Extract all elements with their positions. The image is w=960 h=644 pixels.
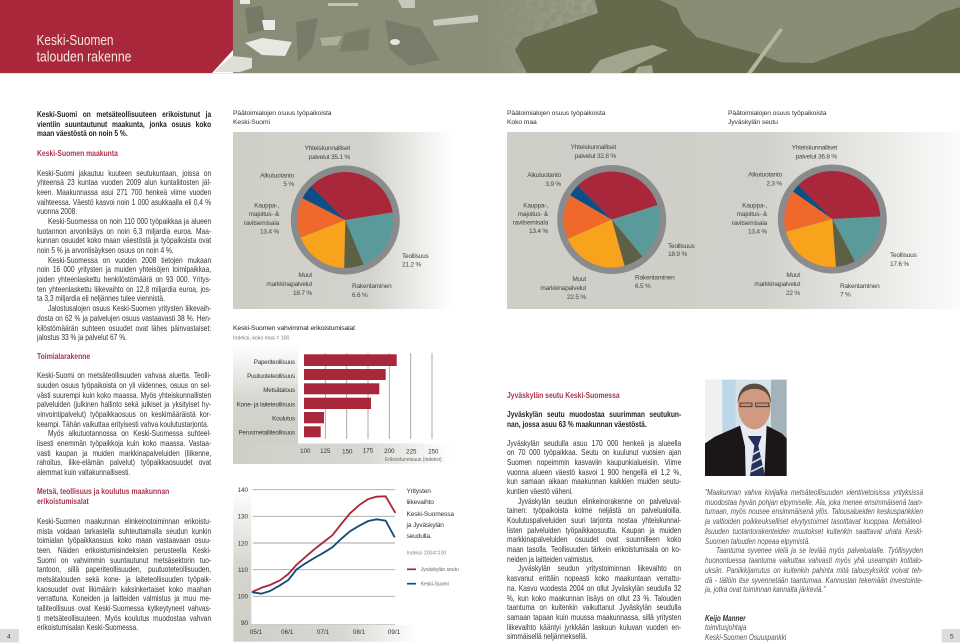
body text: maakunta: dosta on 62 % ja palvelujen osuus vastaavasti 38 %. Hen- <box>37 314 211 323</box>
page number box left: 4 <box>7 634 11 640</box>
bar chart: erikoistumisalat: 150 <box>342 448 353 455</box>
pie labels: Koko maa: markkinapalvelut <box>540 285 586 292</box>
chart title: Keski-Suomi: Keski-Suomi <box>233 119 270 126</box>
line chart caption and legend: Keski-Suomi <box>421 581 449 587</box>
bar chart title: Keski-Suomen vahvimmat erikoistumisalat <box>233 325 355 332</box>
pie chart: Koko maa <box>557 165 666 274</box>
quote text: uksiin. Paniikkijarrutus on kuitenkin pahinta mitä talousyksiköt voivat teh- <box>705 566 923 575</box>
heading: Keski-Suomen maakunta: Keski-Suomen maakunta <box>37 149 118 158</box>
body text: maakunta: ten yhteenlaskettu liikevaihto on 12,8 miljardia euroa, jos- <box>37 285 211 294</box>
pie labels: Koko maa: 6.5 % <box>635 283 651 290</box>
bar chart: erikoistumisalat: 225 <box>406 448 417 455</box>
panel background: Koko maa and Jyväskylän seutu <box>507 132 960 309</box>
heading: Metsä, teollisuus ja koulutus <box>37 487 169 506</box>
quote text: ja, jotka ovat toiminnan kannalta järkeviä.” <box>705 585 825 594</box>
body text: maakunta: Keski-Suomessa on vuoden 2008 tietojen mukaan <box>48 256 211 265</box>
quote attribution <box>705 614 786 642</box>
body text: maakunta: Jalostusalojen osuus Keski-Suomen yritysten liikevaih- <box>48 304 211 313</box>
bar chart: erikoistumisalat: Erikoistuneisuus (indeksi) <box>385 457 442 463</box>
pie labels: Keski-Suomi: Alkutuotanto <box>260 172 295 180</box>
portrait photo <box>705 380 787 476</box>
pie labels: Keski-Suomi: palvelut 35.1 % <box>309 154 350 161</box>
header aerial photo <box>214 0 960 73</box>
line chart caption and legend: ja Jyväskylän <box>406 522 444 529</box>
title: Keski-Suomen <box>36 33 114 49</box>
body text: Jyväskylän seutu: simmäisellä neljänneksellä. <box>507 632 587 641</box>
pie labels: Keski-Suomi <box>244 145 429 299</box>
pie labels: Koko maa: Alkutuotanto <box>527 172 562 179</box>
heading: Toimialarakenne: Toimialarakenne <box>37 352 90 361</box>
pie labels: Jyväskylän seutu: 2.3 % <box>766 180 782 188</box>
body text: toimialarakenne: palveluiden (julkinen hallinto sekä julkiset ja yksityiset hy- <box>37 400 211 409</box>
body text: maakunta: vaihteessa. Väestö kasvoi noin 1 000 asukkaalla eli 0,4 % <box>37 198 211 207</box>
line chart caption and legend: Jyväskylän seutu <box>421 567 459 573</box>
line chart caption and legend: Yritysten <box>406 488 431 495</box>
body text: Jyväskylän seutu: taantuma on kuitenkin vaikuttanut Jyväskylän seudulla <box>507 603 681 612</box>
quote text: ”Maakunnan vahva kivijalka metsäteollisuuden vientivetoisissa yrityksissä <box>705 488 923 497</box>
chart title: Jyväskylän seutu: Päätoimialojen osuus työpaikoista <box>728 110 827 117</box>
body text: toimialarakenne: keampi. Tähän vaikuttaa erityisesti vahva koulutustarjonta. <box>37 420 209 429</box>
body text: Jyväskylän seutu: neiden ja laitteiden valmistus. <box>507 555 594 564</box>
body text: maakunta: jalostus 33 % ja palvelut 67 %. <box>37 333 127 342</box>
body text: erikoistumisalat: metsätalouden sekä kone- ja laiteteollisuuden työpaik- <box>37 575 211 584</box>
pie labels: Jyväskylän seutu: Rakentaminen <box>840 283 880 290</box>
body text: maakunta <box>36 168 212 342</box>
pie labels: Jyväskylän seutu: Alkutuotanto <box>748 172 783 178</box>
body text: Jyväskylän seutu: Koulutuspalveluiden suuri tarjonta nostaa yhteiskunnal- <box>507 516 681 525</box>
pie labels: Keski-Suomi: 6.6 % <box>352 292 368 299</box>
pie labels: Koko maa: 13.4 % <box>529 228 548 235</box>
bar chart: erikoistumisalat: 200 <box>384 448 395 455</box>
body text: maakunta: noin 16 000 yritysten ja muiden yhteisöjen toimipaikkaa, <box>37 265 211 274</box>
body text: Jyväskylän seutu: %, kun koko maakunnan lisäys on ollut 23 %. Talouden <box>507 594 681 602</box>
chart title: Jyväskylän seutu: Jyväskylän seutu <box>728 119 778 126</box>
lead text: Jyväskylän seutu: Jyväskylän seutu muodostaa suurimman seutukun- <box>507 410 681 419</box>
heading: Metsä, teollisuus ja koulutus: erikoistumisalat <box>37 497 89 506</box>
red title panel <box>0 0 233 73</box>
quote text: Taantuma syvenee vielä ja se leviää myös palvelualalle. Työllisyyden <box>716 546 923 555</box>
body text: Jyväskylän seutu: liikevaihto kääntyi jyrkkään laskuun kuluvan vuoden en- <box>507 623 681 632</box>
pie labels: Koko maa: Kauppa-, <box>523 202 548 210</box>
body text: Jyväskylän seutu: samaan tapaan kuin muussa maakunnassa, sillä yritysten <box>507 613 681 622</box>
intro text <box>37 110 212 138</box>
line chart: yritysten liikevaihto: 110 <box>238 567 248 574</box>
body text: erikoistumisalat: teen. Näiden erikoistumisindeksien perusteella Keski- <box>37 546 211 555</box>
body text: Jyväskylän seutu: listen palveluiden työpaikkaosuutta. Kaupan ja muiden <box>507 526 681 535</box>
pie labels: Keski-Suomi: Kauppa-, <box>254 202 279 210</box>
pie labels: Jyväskylän seutu: Muut <box>786 272 800 279</box>
quote text: muodostaa hyvän pohjan elpymiselle. Ala, joka menee ensimmäisenä taan- <box>705 498 923 507</box>
bar chart: erikoistumisalat: Paperiteollisuus <box>254 359 295 366</box>
bar chart: erikoistumisalat: Metsätalous <box>263 387 295 394</box>
pie labels: Koko maa: ravitsemisala <box>513 220 549 226</box>
heading: Jyväskylän seutu: Jyväskylän seutu Keski-Suomessa <box>507 391 620 400</box>
pie labels: Keski-Suomi: Muut <box>298 272 312 279</box>
body text: Jyväskylän seutu: Jyväskylän seudulla asuu 170 000 henkeä ja alueella <box>507 438 681 448</box>
pie labels: Keski-Suomi: Yhteiskunnalliset <box>305 145 350 152</box>
body text: toimialarakenne: suuden osuus työpaikoista on yli viidennes, osuus on sel- <box>37 381 211 390</box>
line chart caption and legend: Indeksi 2004=100 <box>407 551 447 557</box>
pie labels: Koko maa <box>513 144 695 301</box>
line chart: yritysten liikevaihto: 07/1 <box>317 629 330 636</box>
pie labels: Jyväskylän seutu: Teollisuus <box>890 252 917 259</box>
line chart: yritysten liikevaihto: 140 <box>237 487 248 494</box>
pie labels: Keski-Suomi: Teollisuus <box>402 253 429 260</box>
line chart: yritysten liikevaihto <box>233 487 417 642</box>
bar chart: erikoistumisalat <box>233 345 451 464</box>
line chart: yritysten liikevaihto: 06/1 <box>281 629 294 636</box>
pie labels: Koko maa: majoitus- & <box>518 211 549 218</box>
pie labels: Keski-Suomi: ravitsemisala <box>244 220 280 227</box>
white strip under header <box>0 73 960 74</box>
body text: maakunta: yhteensä 23 kuntaa vuoden 2009 alun kuntaliitosten jäl- <box>37 178 211 187</box>
body text: maakunta: tuotannon arvonlisäys on noin 6,3 miljardia euroa. Maa- <box>37 227 211 236</box>
pie labels: Jyväskylän seutu: 17.6 % <box>890 261 909 268</box>
chart title: Koko maa: Koko maa <box>507 119 537 126</box>
title: talouden rakenne <box>36 50 132 66</box>
page number box right <box>942 629 960 642</box>
body text: erikoistumisalat: tantoon, sillä paperiteollisuuden, puutuoteteollisuuden, <box>37 565 211 574</box>
pie labels: Jyväskylän seutu: 7 % <box>840 292 851 298</box>
pie labels: Koko maa: Muut <box>572 276 586 283</box>
body text: Jyväskylän seutu: maan tasolla. Teollisuuden tärkein erikoistumisala on ko- <box>507 545 681 554</box>
quote text <box>704 488 923 594</box>
body text: Jyväskylän seutu: markkinapalveluiden osuudet ovat suunnilleen koko <box>507 535 681 544</box>
pie labels: Keski-Suomi: 13.4 % <box>260 228 279 236</box>
body text: maakunta: vuonna 2008. <box>37 207 77 216</box>
quote text: huonontuessa taantuma vaikuttaa vahvasti myös yhä useampiin kotitalo- <box>705 556 923 565</box>
pie labels: Keski-Suomi: 21.2 % <box>402 262 421 268</box>
pie labels: Jyväskylän seutu: Yhteiskunnalliset <box>792 144 837 152</box>
pie labels: Jyväskylän seutu <box>732 144 917 298</box>
line chart caption and legend: seudulla. <box>406 533 432 540</box>
line chart: yritysten liikevaihto: 100 <box>237 594 248 601</box>
pie labels: Koko maa: palvelut 32.8 % <box>575 153 616 160</box>
quote attribution: toimitusjohtaja <box>705 623 746 632</box>
body text: erikoistumisalat: erikoistumisalan Keski-Suomessa. <box>37 623 138 632</box>
bar chart title: Indeksi, koko maa = 100 <box>233 336 289 342</box>
pie labels: Jyväskylän seutu: majoitus- & <box>737 211 768 218</box>
pie labels: Keski-Suomi: 18.7 % <box>293 290 312 297</box>
body text: toimialarakenne: Keski-Suomi on metsäteollisuuden vahvaa aluetta. Teolli- <box>37 371 211 380</box>
pie labels: Keski-Suomi: markkinapalvelut <box>266 281 312 288</box>
pie labels: Jyväskylän seutu: Kauppa-, <box>742 202 767 210</box>
body text: toimialarakenne: västi suurempi kuin koko maassa. Myös yhteiskunnallisten <box>37 391 211 400</box>
line chart caption and legend <box>406 488 459 587</box>
body text: maakunta: kunnan osuudet koko maan väestöstä ja työpaikoista ovat <box>37 236 211 245</box>
pie labels: Jyväskylän seutu: 13.4 % <box>748 228 767 236</box>
body text: Jyväskylän seutu: Jyväskylän seudun yritystoiminnan liikevaihto on <box>518 564 681 573</box>
chart title: Koko maa: Päätoimialojen osuus työpaikoista <box>507 110 606 117</box>
body text: maakunta: Keski-Suomi jakautuu kuuteen seutukuntaan, joissa on <box>37 168 211 178</box>
pie chart: Keski-Suomi <box>291 166 400 274</box>
body text: toimialarakenne <box>37 371 212 477</box>
chart title: Keski-Suomi <box>233 110 332 126</box>
panel background: Keski-Suomi <box>233 132 453 309</box>
pie labels: Keski-Suomi: majoitus- & <box>249 211 280 218</box>
quote text: Suomen talouden nopeaa elpymistä. <box>705 537 810 546</box>
bar chart: erikoistumisalat: Koulutus <box>272 416 295 422</box>
bar chart: erikoistumisalat: 125 <box>320 448 331 455</box>
page number box left <box>0 629 19 642</box>
body text: erikoistumisalat: mista voidaan tarkastella suhteuttamalla seudun kunkin <box>37 527 211 536</box>
body text: erikoistumisalat: Suomi on vahvimmin suuntautunut metsäsektorin tuo- <box>37 556 211 565</box>
pie labels: Koko maa: Yhteiskunnalliset <box>571 144 616 151</box>
body text: maakunta: Keski-Suomessa on noin 110 000 työpaikkaa ja alueen <box>48 217 211 226</box>
intro text: vientiin suuntautunut maakunta, jonka osuus koko <box>37 120 211 129</box>
bar chart: erikoistumisalat: Kone- ja laiteteollisuus <box>237 402 295 408</box>
body text: Jyväskylän seutu: kasvanut erittäin nopeasti koko maakuntaan verrattu- <box>507 574 681 583</box>
bar chart title <box>233 325 355 342</box>
line chart: yritysten liikevaihto: 08/1 <box>353 629 366 636</box>
body text: erikoistumisalat: talliteollisuus ovat Keski-Suomessa kytkeytyneet vahvas- <box>37 604 211 613</box>
quote attribution: Keijo Manner <box>705 614 746 622</box>
lead text: Jyväskylän seutu <box>507 410 681 429</box>
pie labels: Koko maa: 3.9 % <box>545 181 561 188</box>
body text: toimialarakenne: vinvointipalvelut) työpaikkaosuus on keskimääräistä kor- <box>37 410 211 419</box>
body text: maakunta: joiden yhteenlaskettu henkilöstömäärä on 93 000. Yritys- <box>37 275 211 284</box>
body text: Jyväskylän seutu: na. Kasvu vuodesta 2004 on ollut Jyväskylän seudulla 32 <box>507 584 681 593</box>
bar chart: erikoistumisalat: Puutuoteteollisuus <box>247 373 295 380</box>
line chart: yritysten liikevaihto: 09/1 <box>388 629 401 636</box>
pie labels: Jyväskylän seutu: ravitsemisala <box>732 220 768 227</box>
lead text: Jyväskylän seutu: nan, jossa asuu 63 % maakunnan väestöstä. <box>507 420 647 429</box>
body text: toimialarakenne: Myös alkutuotannossa on Keski-Suomessa suhteel- <box>48 429 211 438</box>
bar chart: erikoistumisalat: 175 <box>363 448 374 455</box>
bar chart: erikoistumisalat: Perusmetalliteollisuus <box>238 430 295 436</box>
body text: toimialarakenne: rahoitus, liike-elämän palvelut) työpaikkaosuudet ovat <box>37 458 211 467</box>
intro text: Keski-Suomi on metsäteollisuuteen erikoistunut ja <box>37 110 211 119</box>
body text: maakunta: keen. Maakunnassa asui 271 700 henkeä viime vuoden <box>37 188 211 197</box>
pie labels: Jyväskylän seutu: 22 % <box>786 290 800 297</box>
page number box right: 5 <box>950 634 954 640</box>
bar chart: erikoistumisalat: 100 <box>300 448 311 455</box>
heading: Metsä, teollisuus ja koulutus: Metsä, teollisuus ja koulutus maakunnan <box>37 487 169 496</box>
chart title: Koko maa <box>507 110 606 126</box>
body text: maakunta: noin 5 % ja arvonlisäyksen osuus on noin 4 %. <box>37 246 174 255</box>
body text: erikoistumisalat: ti metsäteollisuuteen. Myös koulutus muodostaa vahvan <box>37 614 211 623</box>
pie labels: Jyväskylän seutu: markkinapalvelut <box>754 281 800 288</box>
body text: Jyväskylän seutu: Suomen nopeimmin kasvaviin kaupunkialueisiin. Viime <box>507 458 681 467</box>
body text: Jyväskylän seutu: kuntien väestö väheni. <box>507 487 573 496</box>
chart title: Jyväskylän seutu <box>728 110 827 126</box>
body text: maakunta: ta 3,3 miljardia eli neljännes tulee viennistä. <box>37 294 165 303</box>
title <box>36 33 132 66</box>
pie labels: Koko maa: Teollisuus <box>668 243 695 250</box>
body text: erikoistumisalat: verrattuna. Koneiden ja laitteiden valmistus ja muu me- <box>37 594 211 603</box>
body text: Jyväskylän seutu: tainen: työpaikoista kolme neljästä on palvelualoilla. <box>507 506 681 515</box>
pie labels: Koko maa: 18.9 % <box>668 251 687 258</box>
pie labels: Jyväskylän seutu: palvelut 36.8 % <box>796 154 837 160</box>
pie labels: Keski-Suomi: Rakentaminen <box>352 283 392 290</box>
quote text: ja valtioiden poikkeukselliset elvytystoimet tasoittavat kuoppaa. Metsäteol- <box>705 517 923 526</box>
body text: Jyväskylän seutu <box>507 438 682 641</box>
body text: toimialarakenne: vasti kaupan ja muiden markkinapalveluiden (liikenne, <box>37 449 211 458</box>
line chart: yritysten liikevaihto: 130 <box>237 514 248 521</box>
quote text: lisuuden tuotantorakenteiden muutokset kuitenkin saattavat uhata Keski- <box>705 527 923 536</box>
body text: toimialarakenne: lisesti enemmän työpaikkoja kuin koko maassa. Vastaa- <box>37 439 211 448</box>
quote attribution: Keski-Suomen Osuuspankki <box>705 633 786 642</box>
body text: erikoistumisalat: kaosuudet ovat likimäärin kaksinkertaiset koko maahan <box>37 585 211 594</box>
line chart caption and legend: liikevaihto <box>406 499 434 506</box>
chart title: Keski-Suomi: Päätoimialojen osuus työpaikoista <box>233 110 332 117</box>
quote text: dä - tällöin itse syvennetään taantumaa. Kannustan tekemään investointe- <box>705 576 923 585</box>
pie chart: Jyväskylän seutu <box>778 164 887 274</box>
line chart: yritysten liikevaihto: 90 <box>241 620 248 627</box>
line chart: yritysten liikevaihto: 120 <box>237 540 248 547</box>
pie labels: Koko maa: Rakentaminen <box>635 274 675 282</box>
body text: Jyväskylän seutu: vuonna alueen väestö kasvoi 1 900 hengellä eli 1,2 %, <box>507 468 681 477</box>
body text: Jyväskylän seutu: kun samaan aikaan maakunnan kaikkien muiden seutu- <box>507 477 681 486</box>
body text: erikoistumisalat <box>37 517 211 632</box>
line chart caption and legend: Keski-Suomessa <box>406 511 454 518</box>
intro text: maan väestöstä on noin 5 %. <box>37 129 128 138</box>
bar chart: erikoistumisalat: 250 <box>428 449 439 456</box>
quote text: tumaan, myös nousee ensimmäisenä ylös. Talousalueiden keskuspankkien <box>705 507 923 516</box>
body text: toimialarakenne: alemmat kuin valtakunnallisesti. <box>37 468 130 477</box>
pie labels: Koko maa: 22.5 % <box>567 294 586 301</box>
body text: Jyväskylän seutu: on 70 000 työpaikkaa. Seutu on kuulunut vuosien ajan <box>507 448 681 457</box>
body text: erikoistumisalat: toimialan työpaikkaosuus koko maan vastaavaan osuu- <box>37 536 211 545</box>
body text: maakunta: kilöstömäärän suhteen osuudet ovat lähes päinvastaiset: <box>37 324 211 332</box>
pie labels: Keski-Suomi: 5 % <box>283 181 294 188</box>
line chart: yritysten liikevaihto: 05/1 <box>250 629 263 636</box>
body text: Jyväskylän seutu: Jyväskylän seudun elinkeinorakenne on palveluval- <box>518 497 681 506</box>
body text: erikoistumisalat: Keski-Suomen maakunnan elinkeinotoiminnan erikoistu- <box>37 517 211 526</box>
